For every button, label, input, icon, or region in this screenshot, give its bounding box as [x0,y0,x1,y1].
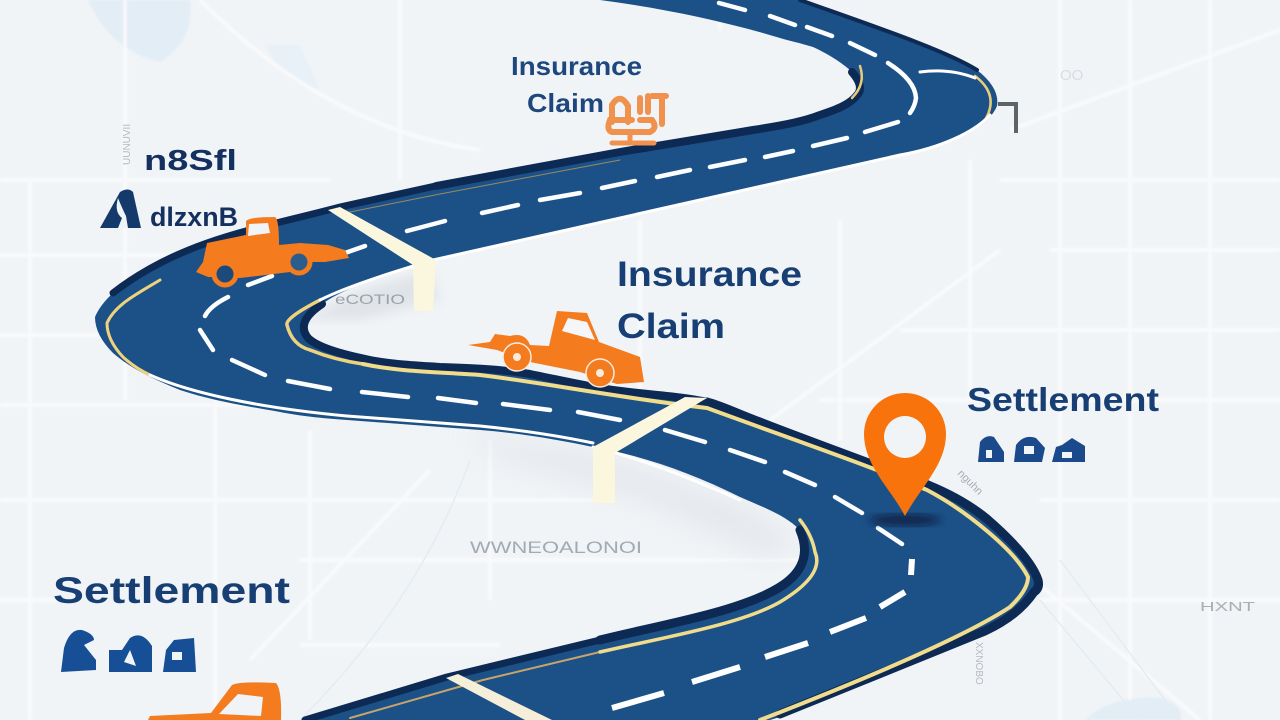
small map text lower right: HXNT [1200,599,1255,614]
heading: Insurance Claim large [617,255,802,346]
icons: settlement left [61,630,196,672]
garbled label: upper left: n8Sfl [144,145,237,177]
icon: orange map pin [864,393,946,516]
truck 2 on road [468,311,644,387]
winding road [95,0,1041,720]
small map text vertical lower right: XXNOBO [973,642,984,685]
road: centre dashes, lower [200,246,902,544]
road: gold edge lines [107,66,1028,720]
checkpoint band 1 [328,207,436,311]
small map text upper right: OO [1060,67,1083,84]
small map text near curve: eCOTIO [335,291,405,307]
truck 3 at bottom [148,682,281,720]
checkpoint band 2 [593,397,707,503]
icons: settlement right [978,436,1085,462]
heading: Insurance Claim small: Insurance [511,51,642,81]
garbled label: upper left: dlzxnB [150,202,238,232]
heading: Insurance Claim small: Claim [527,88,604,118]
small map text beside road right: nguhn [955,468,985,498]
heading: Insurance Claim small [511,51,642,118]
checkpoint band 3 [446,674,552,720]
map pin shadow [869,514,941,526]
road: dark upper edges [113,0,1038,720]
heading: Settlement right: Settlement [967,381,1159,418]
heading: Insurance Claim large: Claim [617,307,725,346]
road shadows [300,270,800,560]
truck 1 on road [196,217,349,285]
heading: Insurance Claim large: Insurance [617,255,802,294]
heading: Settlement left: Settlement [53,570,290,611]
road: wide dashes, bottom [612,559,912,708]
small map text upper left: UUNUVII [122,124,133,165]
garbled label: upper left [144,145,238,232]
road: centre dashes, upper [407,3,916,231]
small map text lower middle: WWNEOALONOI [470,538,642,557]
icon: orange claim icon [608,96,666,143]
corner sign post [998,104,1016,133]
icon: dark triangle marker [100,190,141,228]
road: white edge lines [150,71,990,500]
